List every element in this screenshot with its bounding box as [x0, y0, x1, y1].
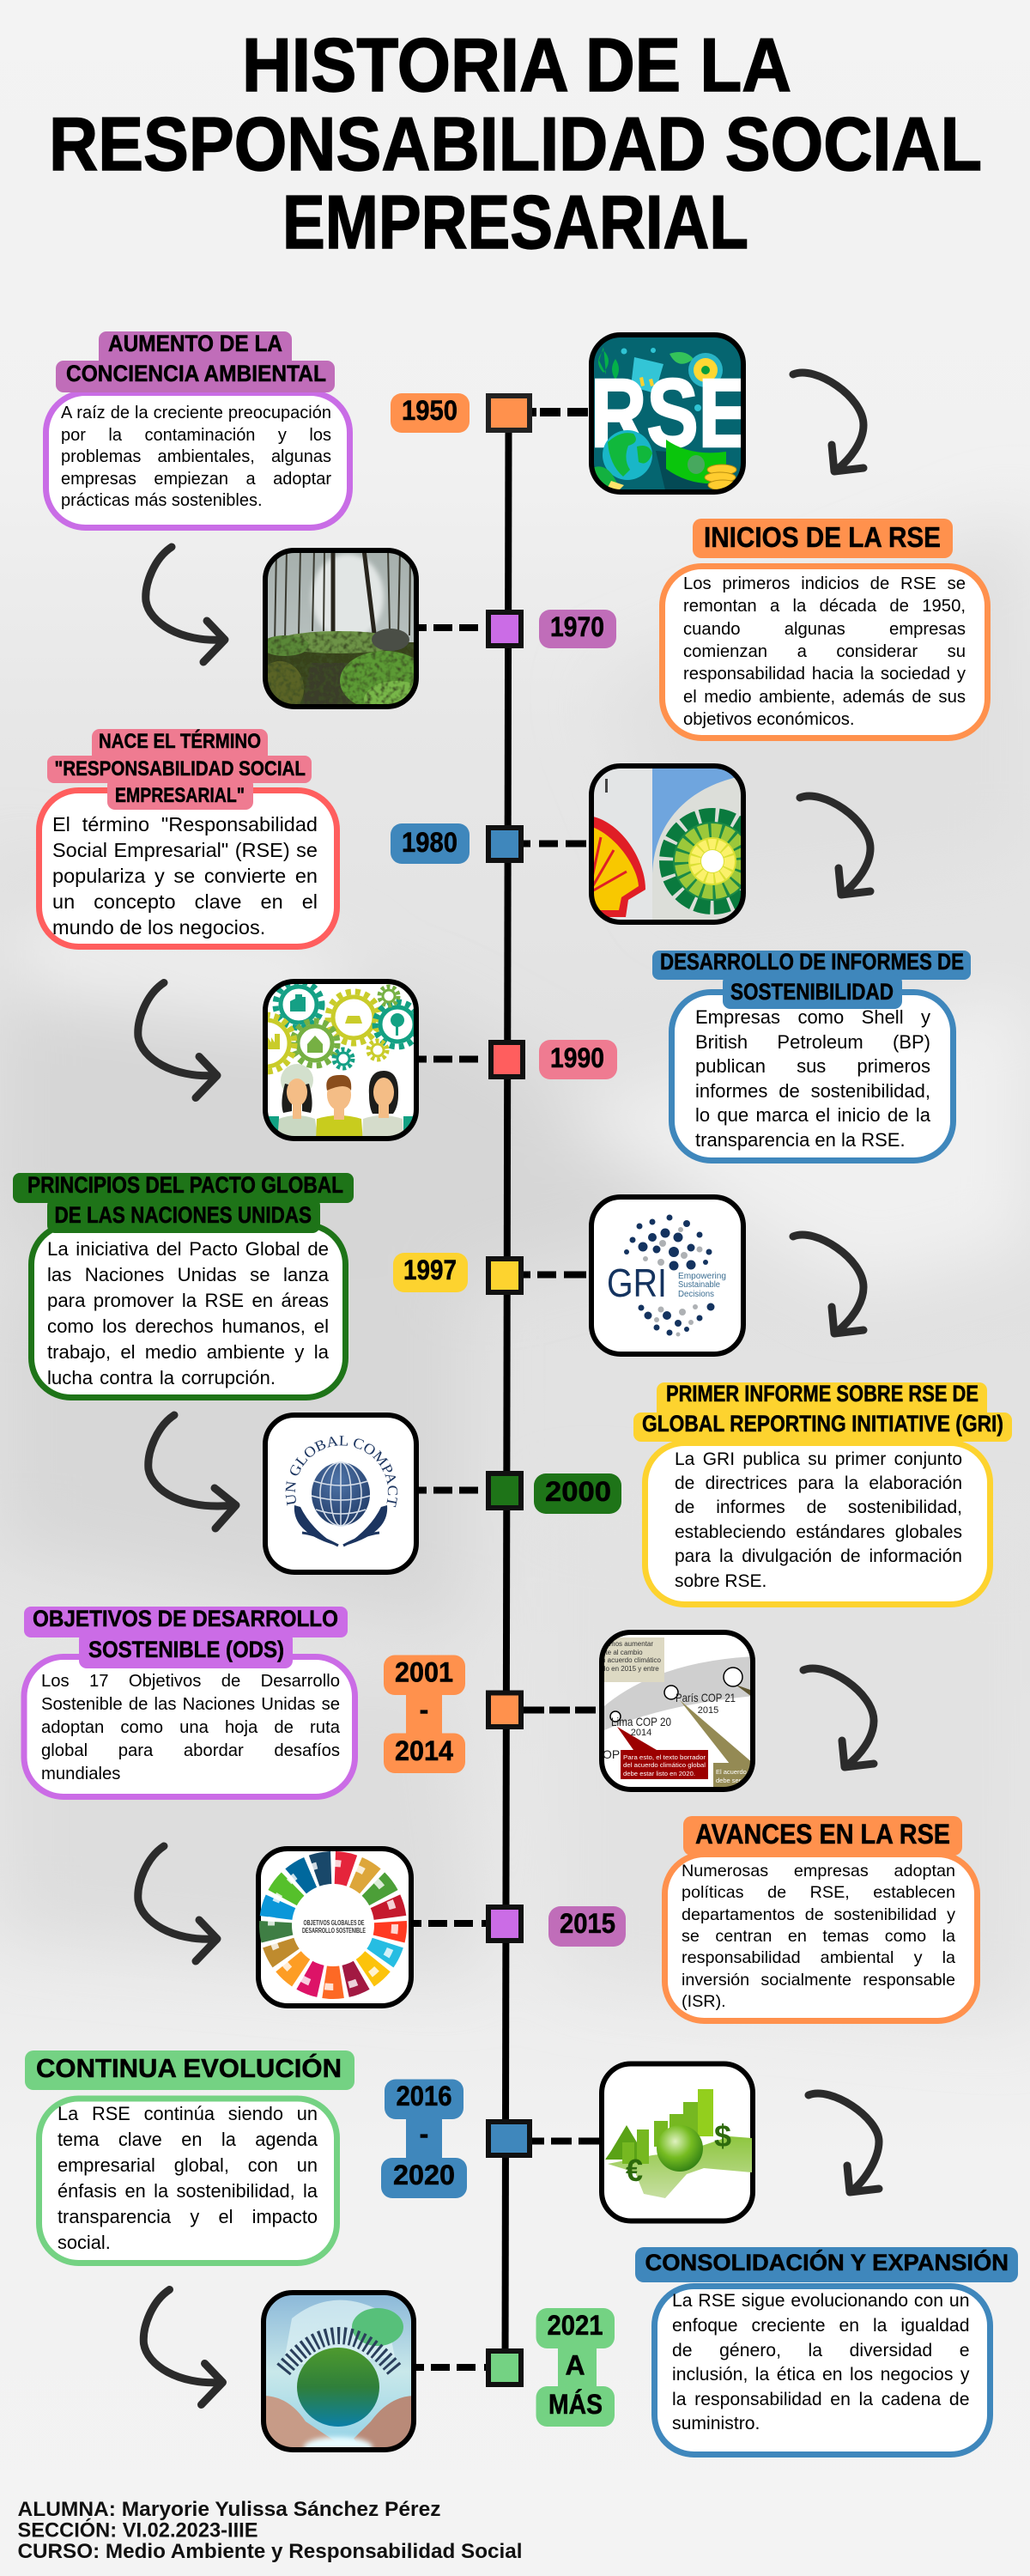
- arrow 1980: [800, 796, 870, 895]
- year badge 1990: 1990: [550, 1042, 604, 1073]
- image: GRI logo: GRI: [607, 1261, 667, 1305]
- panel: nace el término: populariza y se convierte en: [52, 865, 318, 887]
- year badge 2016-2020: 2016: [397, 2081, 451, 2111]
- year badge 1997: 1997: [403, 1255, 457, 1285]
- panel: primer informe GRI: para la divulgación de información: [675, 1546, 962, 1566]
- footer credits: ALUMNA: Maryorie Yulissa Sánchez Pérez: [17, 2498, 441, 2521]
- year badge 1970: 1970: [550, 611, 604, 642]
- year badge 1970: [539, 610, 616, 648]
- footer credits: SECCIÓN: VI.02.2023-IIIE: [17, 2518, 258, 2542]
- panel: avances en la RSE: (ISR).: [682, 1992, 726, 2011]
- year badge 2015: [548, 1906, 626, 1947]
- image: COP timeline slide: El acuerdo: [716, 1768, 747, 1776]
- event 1970 connector and node: [418, 612, 521, 646]
- year badge 1980: 1980: [402, 827, 457, 858]
- panel: continua evolución: [25, 2050, 354, 2263]
- panel: principios del pacto global: [13, 1172, 354, 1398]
- panel: continua evolución: CONTINUA EVOLUCIÓN: [36, 2052, 342, 2083]
- event 1997 connector and node: [488, 1259, 589, 1292]
- arrow 1990: [138, 982, 217, 1097]
- panel: consolidación y expansión: de género, la diversidad e: [672, 2341, 970, 2360]
- panel: primer informe GRI: [633, 1381, 1012, 1604]
- year badge 2016-2020: [381, 2080, 467, 2198]
- panel: consolidación y expansión: CONSOLIDACIÓN Y EXPANSIÓN: [645, 2250, 1009, 2275]
- image: GRI logo: Decisions: [678, 1290, 714, 1299]
- arrow 2021: [143, 2289, 223, 2404]
- panel: aumento de la conciencia ambiental: [46, 331, 350, 527]
- arrow 1970: [146, 547, 225, 662]
- panel: continua evolución: tema clave en la agenda: [58, 2129, 318, 2150]
- event 2016-2020 connector and node: [488, 2122, 599, 2155]
- panel: primer informe GRI: estableciendo estándares globales: [675, 1522, 962, 1542]
- event 1990 connector and node: [418, 1042, 523, 1077]
- panel: inicios de la RSE: el medio ambiente, además de sus: [683, 688, 966, 707]
- image: forest: [263, 548, 419, 709]
- panel: avances en la RSE: se centran en temas como la: [682, 1927, 955, 1946]
- panel: inicios de la RSE: cuando algunas empresas: [683, 620, 966, 639]
- image: COP timeline slide: nte al cambio: [602, 1649, 643, 1656]
- image: GRI logo: [591, 1197, 743, 1354]
- panel: aumento de la conciencia ambiental: AUMENTO DE LA: [108, 331, 282, 356]
- year badge 2016-2020: 2020: [393, 2160, 455, 2190]
- panel: desarrollo de informes: DESARROLLO DE INFORMES DE: [660, 949, 964, 975]
- panel: inicios de la RSE: Los primeros indicios de RSE se: [683, 574, 966, 593]
- image: RSE illustration: RSE: [591, 359, 750, 467]
- panel: inicios de la RSE: remontan a la década de 1950,: [683, 597, 966, 616]
- image: SDG wheel: OBJETIVOS GLOBALES DE: [304, 1919, 365, 1927]
- image: GRI logo: Empowering: [678, 1272, 726, 1281]
- panel: avances en la RSE: inversión socialmente responsable: [682, 1971, 955, 1990]
- image: hands holding green globe: [261, 2290, 416, 2458]
- image: UN Global Compact logo: [263, 1413, 419, 1575]
- title: [49, 22, 982, 264]
- panel: desarrollo de informes: informes de sostenibilidad,: [695, 1080, 930, 1102]
- image: COP timeline slide: París COP 21: [676, 1691, 736, 1704]
- year badge 1997: [393, 1253, 468, 1292]
- panel: continua evolución: énfasis en la sostenibilidad, la: [58, 2180, 318, 2202]
- panel: consolidación y expansión: La RSE sigue evolucionando con un: [672, 2291, 970, 2311]
- panel: desarrollo de informes: Empresas como Shell y: [695, 1006, 930, 1028]
- image: COP timeline slide: do en 2015 y entre: [602, 1665, 659, 1673]
- image: COP timeline slide: 2014: [631, 1728, 651, 1738]
- panel: principios del pacto global: PRINCIPIOS DEL PACTO GLOBAL: [27, 1172, 343, 1198]
- arrow 2016: [809, 2093, 879, 2192]
- panel: primer informe GRI: La GRI publica su primer conjunto: [675, 1449, 962, 1468]
- panel: objetivos de desarrollo sostenible: Sostenible de las Naciones Unidas se: [41, 1695, 340, 1714]
- panel: objetivos de desarrollo sostenible: OBJETIVOS DE DESARROLLO: [33, 1606, 338, 1631]
- panel: inicios de la RSE: comienzan a considerar su: [683, 642, 966, 661]
- panel: principios del pacto global: para promover la RSE en áreas: [47, 1290, 329, 1311]
- year badge 2015: 2015: [560, 1908, 615, 1939]
- panel: nace el término: un concepto clave en el: [52, 890, 318, 913]
- image: UN Global Compact logo: UN GLOBAL COMPACT: [285, 1436, 398, 1508]
- panel: nace el término: "RESPONSABILIDAD SOCIAL: [55, 757, 306, 781]
- image: COP timeline slide: [598, 1630, 755, 1793]
- panel: objetivos de desarrollo sostenible: SOSTENIBLE (ODS): [88, 1637, 284, 1662]
- arrow 1950: [793, 373, 863, 471]
- panel: avances en la RSE: responsabilidad ambiental y la: [682, 1948, 955, 1967]
- panel: avances en la RSE: [664, 1816, 977, 2021]
- panel: inicios de la RSE: INICIOS DE LA RSE: [704, 521, 941, 553]
- year badge 2001-2014: [384, 1656, 465, 1773]
- year badge 2021 a más: A: [565, 2349, 585, 2380]
- year badge 2021 a más: 2021: [548, 2310, 603, 2341]
- panel: principios del pacto global: DE LAS NACIONES UNIDAS: [55, 1202, 312, 1228]
- image: COP timeline slide: debe estar listo en 2020.: [623, 1770, 695, 1777]
- panel: principios del pacto global: trabajo, el medio ambiente y la: [47, 1341, 329, 1363]
- panel: primer informe GRI: de informes de sostenibilidad,: [675, 1498, 962, 1517]
- panel: nace el término: Social Empresarial" (RSE) se: [52, 839, 318, 861]
- image: gears and people: [263, 979, 419, 1141]
- event 2000 connector and node: [418, 1473, 521, 1508]
- panel: consolidación y expansión: enfoque creciente en la igualdad: [672, 2316, 970, 2336]
- title: HISTORIA DE LA: [242, 22, 791, 107]
- year badge 2016-2020: -: [420, 2118, 428, 2149]
- image: GRI logo: Sustainable: [678, 1280, 720, 1290]
- arrow 1997: [793, 1235, 863, 1334]
- image: green finance globe: [602, 2064, 753, 2221]
- panel: nace el término: NACE EL TÉRMINO: [99, 729, 261, 753]
- image: Shell and BP logos: [589, 763, 757, 927]
- panel: avances en la RSE: departamentos de sostenibilidad y: [682, 1905, 955, 1924]
- year badge 2001-2014: 2014: [395, 1735, 453, 1766]
- panel: objetivos de desarrollo sostenible: mundiales: [41, 1765, 120, 1783]
- panel: continua evolución: La RSE continúa siendo un: [58, 2103, 318, 2124]
- panel: objetivos de desarrollo sostenible: [24, 1606, 355, 1796]
- event 2001-2014 connector and node: [488, 1693, 598, 1727]
- year badge 2021 a más: MÁS: [548, 2389, 603, 2420]
- panel: consolidación y expansión: inclusión, la ética en los negocios y: [672, 2365, 970, 2385]
- year badge 2001-2014: -: [420, 1694, 428, 1725]
- footer credits: CURSO: Medio Ambiente y Responsabilidad Social: [17, 2540, 522, 2563]
- image: COP timeline slide: Lima COP 20: [611, 1715, 671, 1728]
- image: SDG wheel: [251, 1844, 415, 2007]
- year badge 2001-2014: 2001: [395, 1657, 453, 1688]
- panel: aumento de la conciencia ambiental: por la contaminación y los: [61, 426, 331, 445]
- year badge 1950: [391, 393, 470, 433]
- panel: principios del pacto global: las Naciones Unidas se lanza: [47, 1264, 329, 1285]
- image: green finance globe: $: [714, 2118, 731, 2154]
- panel: continua evolución: social.: [58, 2232, 111, 2253]
- image: RSE illustration: [589, 332, 750, 497]
- image: green finance globe: €: [626, 2153, 643, 2188]
- image: SDG wheel: DESARROLLO SOSTENIBLE: [302, 1927, 366, 1935]
- year badge 1980: [391, 823, 470, 864]
- panel: aumento de la conciencia ambiental: CONCIENCIA AMBIENTAL: [66, 361, 326, 386]
- panel: continua evolución: transparencia y el impacto: [58, 2206, 318, 2227]
- panel: aumento de la conciencia ambiental: empresas empiezan a adoptar: [61, 470, 331, 489]
- panel: nace el término: [39, 729, 336, 946]
- event 2015 connector and node: [413, 1907, 521, 1941]
- year badge 1950: 1950: [402, 395, 457, 426]
- panel: aumento de la conciencia ambiental: prácticas más sostenibles.: [61, 491, 263, 510]
- panel: continua evolución: empresarial global, con un: [58, 2154, 318, 2176]
- panel: desarrollo de informes: British Petroleum (BP): [695, 1031, 930, 1053]
- timeline spine: [505, 429, 508, 2370]
- panel: desarrollo de informes: lo que marca el inicio de la: [695, 1104, 930, 1126]
- panel: consolidación y expansión: [635, 2247, 1018, 2454]
- year badge 1990: [539, 1040, 617, 1079]
- panel: primer informe GRI: de directrices para la elaboración: [675, 1473, 962, 1493]
- event 1950 connector and node: [488, 396, 589, 430]
- panel: principios del pacto global: lucha contra la corrupción.: [47, 1367, 276, 1388]
- panel: avances en la RSE: AVANCES EN LA RSE: [695, 1819, 950, 1850]
- image: COP timeline slide: del acuerdo climático global: [623, 1761, 706, 1769]
- event 2021 connector and node: [415, 2351, 521, 2385]
- image: COP timeline slide: debe ser a: [716, 1777, 747, 1784]
- panel: principios del pacto global: La iniciativa del Pacto Global de: [47, 1238, 329, 1260]
- panel: consolidación y expansión: suministro.: [672, 2414, 760, 2433]
- image: COP timeline slide: Para esto, el texto borrador: [623, 1753, 706, 1761]
- panel: nace el término: El término "Responsabilidad: [52, 813, 318, 835]
- panel: nace el término: mundo de los negocios.: [52, 916, 265, 939]
- image: COP timeline slide: n acuerdo climático: [602, 1656, 661, 1664]
- arrow 2000: [148, 1415, 236, 1528]
- panel: consolidación y expansión: la responsabilidad en la cadena de: [672, 2390, 970, 2409]
- panel: inicios de la RSE: [663, 519, 987, 738]
- year badge 2021 a más: [536, 2308, 615, 2427]
- panel: nace el término: EMPRESARIAL": [115, 784, 245, 807]
- panel: primer informe GRI: sobre RSE.: [675, 1571, 766, 1591]
- panel: avances en la RSE: políticas de RSE, establecen: [682, 1883, 955, 1902]
- arrow 2014: [803, 1668, 874, 1767]
- panel: aumento de la conciencia ambiental: problemas ambientales, algunas: [61, 447, 331, 466]
- footer credits: [17, 2498, 522, 2563]
- panel: principios del pacto global: como los derechos humanos, el: [47, 1315, 329, 1337]
- panel: objetivos de desarrollo sostenible: global para abordar desafíos: [41, 1741, 340, 1760]
- panel: desarrollo de informes: [652, 949, 971, 1161]
- image: COP timeline slide: bemos aumentar: [602, 1640, 653, 1648]
- image: COP timeline slide: 2015: [698, 1705, 718, 1716]
- panel: desarrollo de informes: transparencia en la RSE.: [695, 1129, 906, 1151]
- panel: desarrollo de informes: publican sus primeros: [695, 1055, 930, 1077]
- year badge 2000: 2000: [545, 1476, 611, 1507]
- panel: avances en la RSE: Numerosas empresas adoptan: [682, 1862, 955, 1880]
- title: EMPRESARIAL: [282, 179, 748, 264]
- arrow 2015: [138, 1846, 217, 1961]
- event 1980 connector and node: [488, 828, 589, 860]
- panel: inicios de la RSE: objetivos económicos.: [683, 710, 855, 729]
- panel: aumento de la conciencia ambiental: A raíz de la creciente preocupación: [61, 404, 331, 422]
- year badge 2000: [534, 1473, 621, 1514]
- panel: objetivos de desarrollo sostenible: adoptan como una hoja de ruta: [41, 1718, 340, 1737]
- panel: desarrollo de informes: SOSTENIBILIDAD: [730, 979, 894, 1005]
- panel: objetivos de desarrollo sostenible: Los 17 Objetivos de Desarrollo: [41, 1672, 340, 1691]
- panel: inicios de la RSE: responsabilidad hacia la sociedad y: [683, 665, 966, 683]
- image: COP timeline slide: OP: [603, 1747, 620, 1761]
